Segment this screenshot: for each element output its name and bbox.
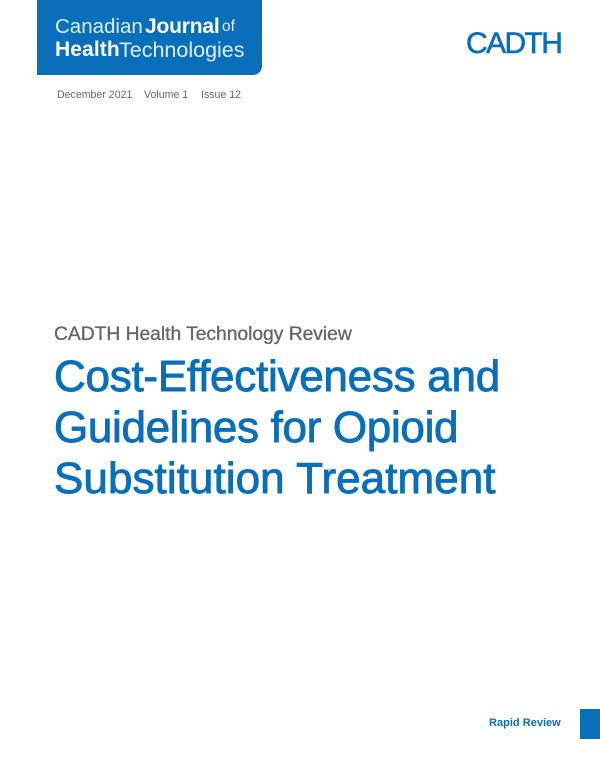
main title: Substitution Treatment: [54, 454, 496, 503]
journal name line 1: of: [222, 18, 235, 35]
journal name line 2: Health: [55, 38, 120, 61]
issue line: Volume 1: [144, 89, 188, 101]
issue line: [57, 89, 241, 101]
page tab: [580, 709, 600, 739]
issue line: Issue 12: [201, 89, 241, 101]
journal name line 1: Canadian: [55, 15, 143, 38]
journal banner: [37, 0, 262, 75]
journal name line 1: Journal: [145, 15, 219, 38]
main title: [54, 352, 500, 503]
CADTH logo: CADTH: [466, 27, 561, 60]
journal name line 2: Technologies: [119, 38, 245, 62]
issue line: December 2021: [57, 89, 132, 101]
journal name line 1: [55, 15, 235, 38]
main title: Cost-Effectiveness and: [54, 352, 500, 401]
report type label: Rapid Review: [489, 717, 561, 729]
main title: Guidelines for Opioid: [54, 403, 458, 452]
journal name line 2: [55, 38, 245, 62]
series heading: CADTH Health Technology Review: [54, 324, 352, 345]
